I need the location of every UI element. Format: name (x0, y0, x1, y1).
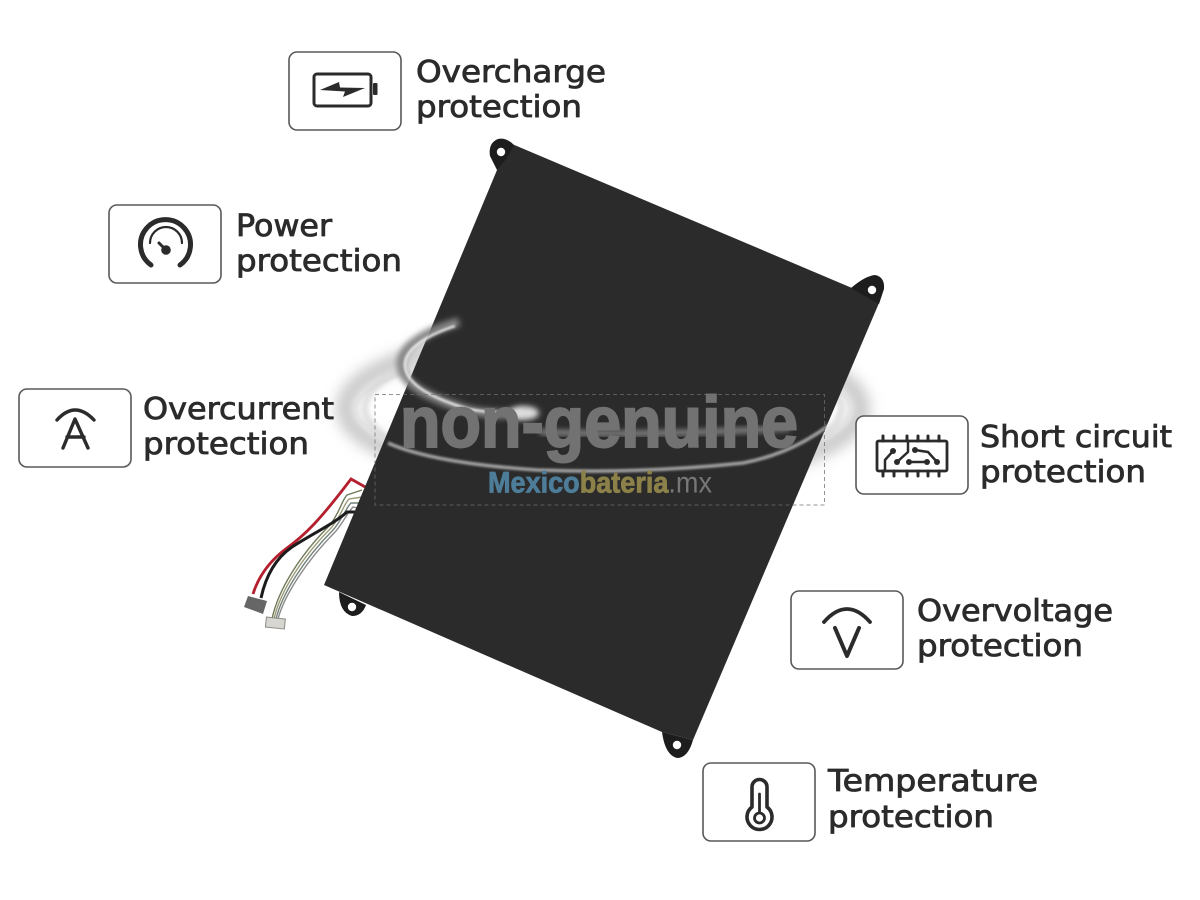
label: Overcurrent (143, 392, 334, 427)
red wire (253, 479, 367, 594)
white connector (265, 617, 285, 629)
swirl glow behind battery (345, 332, 861, 484)
feature: power protection: protection (236, 244, 402, 279)
watermark: non-genuine: non-genuine (400, 383, 798, 463)
icon: ampere (57, 410, 94, 448)
icon: thermometer (747, 780, 772, 829)
label: Power (236, 209, 333, 244)
grey connector (244, 596, 267, 614)
label: Temperature (827, 764, 1038, 799)
label: Short circuit (980, 420, 1172, 455)
feature: temperature protection (703, 763, 1038, 841)
feature: power protection (109, 205, 402, 283)
top-left mounting tab (490, 139, 514, 170)
dashed watermark frame (375, 394, 824, 505)
feature: overcharge protection (289, 52, 606, 130)
feature: short circuit protection: protection (980, 455, 1146, 490)
feature: overvoltage protection: protection (917, 629, 1083, 664)
left mounting tab (339, 592, 366, 616)
feature: short circuit protection (856, 416, 1172, 494)
right mounting tab (851, 275, 884, 304)
watermark: Mexicobateria.mx: Mexicobateria.mx (488, 466, 712, 500)
wires and connectors (244, 479, 367, 629)
black wire (261, 512, 358, 598)
icon: gauge (140, 220, 190, 265)
icon: circuit chip (877, 436, 947, 476)
label: Overcharge (416, 55, 606, 90)
battery body (324, 144, 879, 740)
icon: battery charge (314, 74, 378, 106)
feature: temperature protection: protection (828, 800, 994, 835)
multicolour signal wires (272, 490, 362, 619)
swirl crescent (401, 322, 539, 420)
feature: overcharge protection: protection (416, 90, 582, 125)
battery (324, 139, 884, 758)
swirl highlight over battery (386, 422, 828, 474)
feature: overvoltage protection (791, 591, 1113, 669)
feature: overcurrent protection: protection (143, 427, 309, 462)
icon: volt (824, 609, 870, 656)
bottom mounting tab (662, 732, 693, 758)
feature: overcurrent protection (19, 389, 334, 467)
label: Overvoltage (917, 594, 1113, 629)
